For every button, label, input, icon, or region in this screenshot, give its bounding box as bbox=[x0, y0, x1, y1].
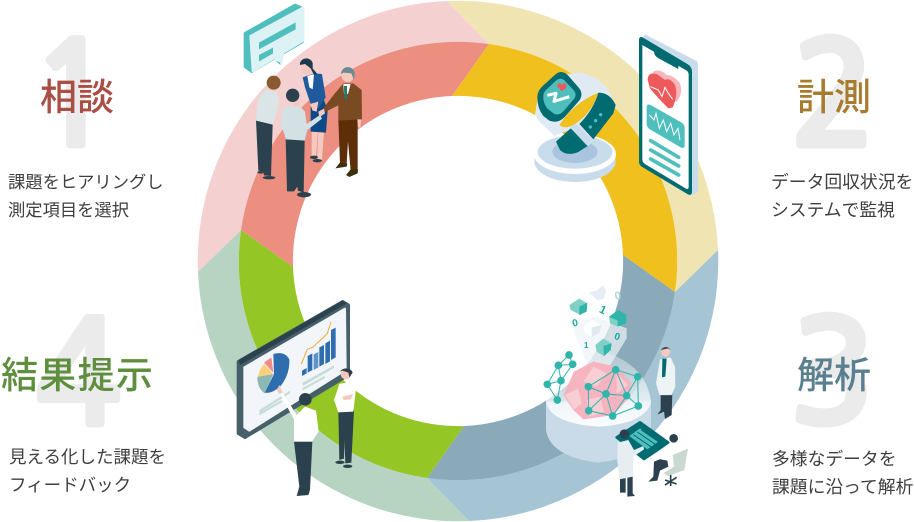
icon: data cubes and digits: 1 bbox=[597, 304, 608, 317]
panel: step 1 consultation bbox=[8, 26, 164, 220]
text lines on board bbox=[259, 365, 334, 415]
icon: data cubes and digits: 1 bbox=[584, 341, 589, 350]
numeral 2: 2 bbox=[790, 26, 877, 168]
ring chart: four-step cycle bbox=[198, 1, 718, 521]
description: step 2: データ回収状況を bbox=[771, 172, 913, 192]
description: step 2 bbox=[771, 172, 913, 220]
bar and line chart bbox=[301, 322, 336, 376]
illustration: wearable and phone bbox=[534, 34, 698, 195]
icon: display board bbox=[238, 301, 348, 437]
heading: 解析: 解析 bbox=[797, 355, 871, 396]
numeral 3: 3 bbox=[789, 304, 876, 446]
ring segment: measurement bbox=[447, 1, 718, 292]
pie chart bbox=[257, 353, 289, 393]
heading: 相談: 相談 bbox=[40, 77, 114, 118]
description: step 3: 課題に沿って解析 bbox=[772, 476, 913, 496]
description: step 3 bbox=[772, 449, 913, 496]
panel: step 2 measurement bbox=[771, 26, 913, 220]
description: step 4: フィードバック bbox=[9, 474, 131, 494]
person: woman in blue suit bbox=[300, 58, 328, 162]
ring segment: consultation bbox=[198, 1, 489, 272]
person: seated scientist bbox=[648, 434, 688, 486]
heading: 計測: 計測 bbox=[797, 77, 871, 118]
heading: 結果提示: 結果提示 bbox=[1, 355, 154, 396]
icon: funnel of data bbox=[571, 317, 627, 369]
description: step 2: システムで監視 bbox=[771, 200, 895, 220]
description: step 4: 見える化した課題を bbox=[9, 447, 166, 467]
person: woman with crossed arms bbox=[334, 368, 356, 468]
person: standing scientist bbox=[656, 347, 675, 419]
ring segment: results bbox=[198, 230, 469, 521]
person: man pointing at board bbox=[277, 385, 319, 496]
icon: pink brain bbox=[563, 362, 632, 419]
panel: step 4 results bbox=[1, 305, 166, 494]
icon: data cubes and digits bbox=[569, 285, 627, 356]
person: man in brown suit bbox=[318, 67, 362, 177]
illustration: brain analysis bbox=[544, 285, 688, 497]
icon: teal tablet bbox=[617, 422, 668, 459]
description: step 1 bbox=[8, 172, 164, 220]
icon: glass dome bbox=[546, 350, 651, 427]
description: step 4 bbox=[9, 447, 166, 494]
icon: neural network bbox=[544, 352, 642, 419]
icon: speech bubble bbox=[245, 5, 303, 72]
icon: data cubes and digits: 0 bbox=[571, 317, 580, 330]
icon: data cubes and digits: 0 bbox=[614, 290, 622, 303]
description: step 3: 多様なデータを bbox=[772, 449, 896, 469]
panel: step 3 analysis bbox=[772, 304, 913, 496]
numeral 1: 1 bbox=[29, 26, 116, 168]
person: back figure with brown hair bbox=[256, 76, 281, 179]
ring segment: analysis bbox=[427, 250, 718, 521]
icon: smartphone with heart data bbox=[639, 34, 698, 195]
icon: data cubes and digits: 0 bbox=[613, 331, 622, 343]
person: man in light shirt shaking hands bbox=[281, 89, 322, 197]
illustration: consultation people bbox=[245, 5, 362, 197]
icon: smartwatch on stand bbox=[534, 72, 616, 182]
numeral 4: 4 bbox=[35, 305, 122, 447]
illustration: results presentation bbox=[238, 301, 356, 496]
description: step 1: 課題をヒアリングし bbox=[8, 172, 164, 192]
icon: pedestal bbox=[546, 402, 651, 463]
description: step 1: 測定項目を選択 bbox=[8, 200, 129, 220]
person: scientist holding tablet bbox=[617, 429, 644, 497]
